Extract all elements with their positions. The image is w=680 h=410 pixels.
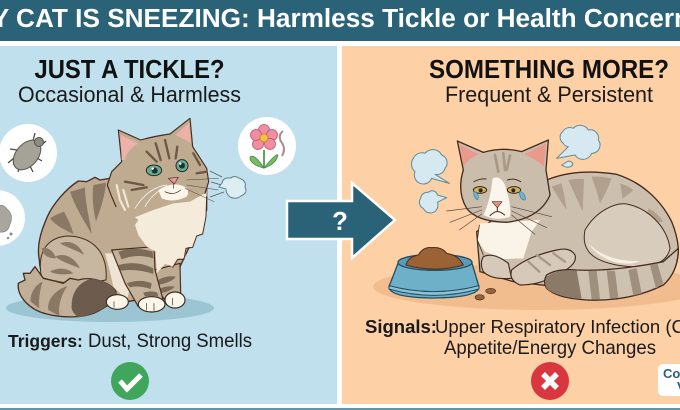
footer strip: [0, 408, 680, 410]
cat chest fluff: [123, 190, 207, 273]
sneeze clouds: [412, 125, 600, 213]
cat nose and mouth: [492, 202, 502, 208]
food bowl: [389, 248, 479, 298]
cat right front leg: [155, 263, 181, 302]
cat chest: [477, 220, 540, 259]
cat paws: [106, 295, 128, 309]
cat tail: [18, 267, 116, 317]
heading: just a tickle: JUST A TICKLE?: [34, 56, 224, 84]
cat eyes and tears: [473, 187, 487, 193]
cat haunch: [584, 204, 670, 267]
text: appetite and energy changes: Appetite/Energy Changes: [444, 337, 656, 359]
cat eyes: [146, 165, 162, 176]
cat whiskers: [447, 207, 552, 234]
text: triggers: Triggers:: [8, 331, 83, 351]
cat left front leg: [112, 247, 164, 307]
cat head: [457, 140, 550, 222]
cat nose and whiskers: [168, 177, 178, 184]
title banner: [0, 0, 680, 41]
text: signals: Signals:: [365, 316, 437, 337]
icon: flower with scent: [238, 117, 296, 175]
cat body: [477, 172, 678, 292]
icon: dust cloud: [0, 190, 25, 246]
illustration: sad cat with food bowl: [373, 125, 680, 310]
cat haunch: [40, 236, 106, 285]
icon: dust mite: [0, 124, 57, 182]
icon: red cross: [531, 362, 569, 400]
text: triggers: Dust, Strong Smells: [88, 331, 252, 352]
cat paws: [481, 255, 512, 279]
arrow: from tickle to something more: [287, 183, 395, 258]
icon: sneeze puff: [210, 171, 246, 198]
question mark: ?: [332, 206, 348, 236]
heading: something more: SOMETHING MORE?: [429, 56, 669, 84]
illustration: sitting tabby cat: [6, 118, 218, 322]
subheading: frequent and persistent: Frequent & Persistent: [445, 82, 653, 107]
cat body: [38, 177, 207, 302]
cat tail: [545, 248, 678, 300]
panel: something more: [342, 46, 680, 404]
callout: consult vet: [658, 364, 680, 396]
panel: just a tickle: [0, 46, 337, 404]
cat head: [107, 118, 209, 220]
icon: green check: [111, 362, 149, 400]
subheading: occasional and harmless: Occasional & Harmless: [18, 82, 241, 107]
